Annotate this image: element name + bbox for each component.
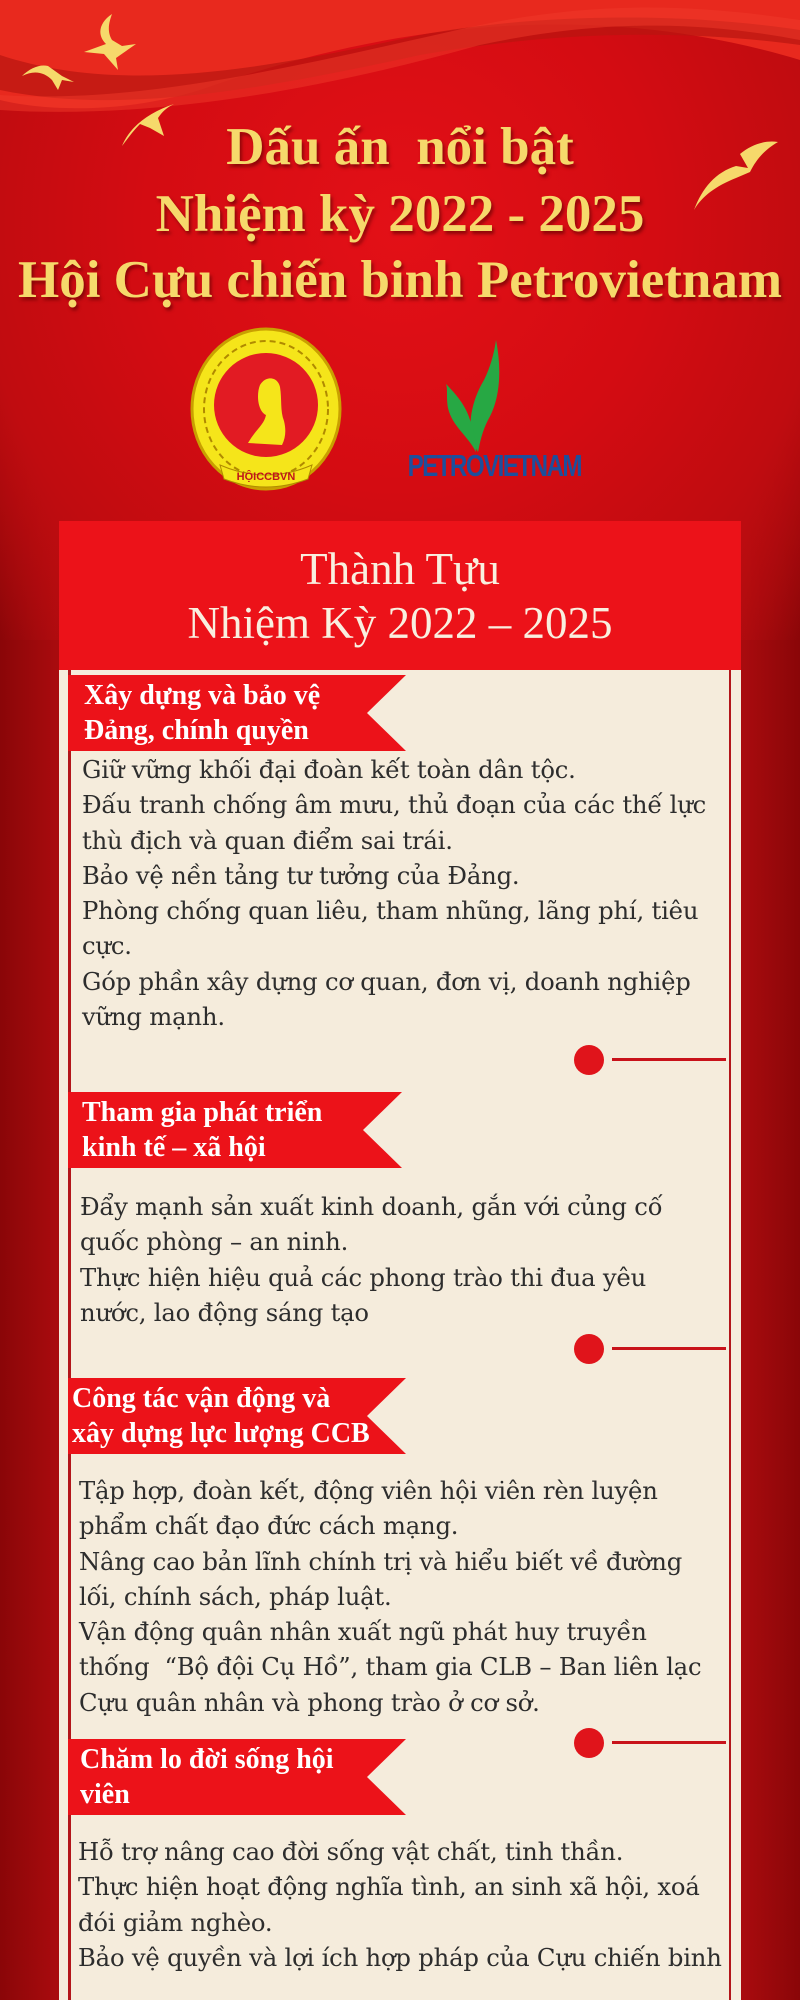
- section 1 text: Giữ vững khối đại đoàn kết toàn dân tộc.: [82, 755, 576, 784]
- icon: birds: [22, 14, 778, 210]
- flag wave top: [0, 0, 800, 112]
- section 3 text: Tập hợp, đoàn kết, động viên hội viên rèn luyện: [79, 1476, 658, 1505]
- title: Nhiệm kỳ 2022 - 2025: [156, 185, 644, 243]
- title: Dấu ấn nổi bật: [226, 118, 574, 176]
- divider dot 1: [574, 1045, 726, 1075]
- logo: Hội CCB emblem: HỘICCBVN: [237, 470, 295, 483]
- section 1 text: Đấu tranh chống âm mưu, thủ đoạn của các thế lực: [82, 790, 706, 819]
- panel: achievements: [59, 521, 741, 2000]
- section 3 ribbon: Công tác vận động và: [72, 1383, 330, 1414]
- section 4 text: Thực hiện hoạt động nghĩa tình, an sinh xã hội, xoá: [78, 1872, 700, 1901]
- logo: Petrovietnam: [408, 340, 581, 483]
- section 2 text: nước, lao động sáng tạo: [80, 1298, 369, 1327]
- section 4 ribbon: [68, 1739, 406, 1815]
- title: Hội Cựu chiến binh Petrovietnam: [18, 251, 782, 309]
- section 1 ribbon: Đảng, chính quyền: [84, 715, 309, 746]
- panel header: Thành Tựu: [300, 544, 500, 594]
- section 3 text: Nâng cao bản lĩnh chính trị và hiểu biết về đường: [79, 1547, 682, 1576]
- section 3 text: phẩm chất đạo đức cách mạng.: [79, 1511, 458, 1540]
- section 1 text: Góp phần xây dựng cơ quan, đơn vị, doanh nghiệp: [82, 967, 691, 996]
- section 1 text: Bảo vệ nền tảng tư tưởng của Đảng.: [82, 861, 519, 890]
- section 2 text: [80, 1192, 662, 1327]
- section 3 text: lối, chính sách, pháp luật.: [79, 1582, 392, 1611]
- section 3 text: Vận động quân nhân xuất ngũ phát huy truyền: [79, 1617, 647, 1646]
- background: red flag top: [0, 0, 800, 640]
- section 2 ribbon: kinh tế – xã hội: [82, 1132, 266, 1163]
- section 1 text: vững mạnh.: [82, 1002, 225, 1031]
- section 3 text: Cựu quân nhân và phong trào ở cơ sở.: [79, 1688, 540, 1717]
- section 1 ribbon: [68, 675, 406, 751]
- decorative border lines: [68, 670, 71, 2000]
- section 4 text: Bảo vệ quyền và lợi ích hợp pháp của Cựu chiến binh: [78, 1943, 722, 1972]
- panel header: [59, 521, 741, 670]
- section 4 text: Hỗ trợ nâng cao đời sống vật chất, tinh thần.: [78, 1837, 623, 1866]
- section 4 ribbon: Chăm lo đời sống hội: [80, 1744, 334, 1775]
- divider dot 2: [574, 1334, 726, 1364]
- divider dot 3: [574, 1728, 726, 1758]
- section 2 text: quốc phòng – an ninh.: [80, 1227, 348, 1256]
- title: [18, 118, 784, 312]
- section 1 ribbon: Xây dựng và bảo vệ: [84, 680, 320, 711]
- logo: Hội CCB emblem: [190, 328, 342, 490]
- section 3 text: thống “Bộ đội Cụ Hồ”, tham gia CLB – Ban liên lạc: [79, 1652, 701, 1681]
- section 4 text: [78, 1837, 722, 1972]
- section 2 text: Thực hiện hiệu quả các phong trào thi đua yêu: [80, 1263, 646, 1292]
- section 1 text: cực.: [82, 931, 132, 960]
- section 4 ribbon: viên: [80, 1779, 130, 1810]
- section 1 text: [82, 755, 706, 1031]
- section 3 text: [78, 1476, 701, 1717]
- section 2 ribbon: Tham gia phát triển: [82, 1097, 322, 1128]
- section 1 text: Phòng chống quan liêu, tham nhũng, lãng phí, tiêu: [82, 896, 698, 925]
- section 3 ribbon: xây dựng lực lượng CCB: [72, 1418, 370, 1449]
- section 3 ribbon: [68, 1378, 406, 1454]
- section 1 text: thù địch và quan điểm sai trái.: [82, 826, 453, 855]
- section 2 ribbon: [68, 1092, 402, 1168]
- logo: Petrovietnam: PETROVIETNAM: [408, 448, 581, 483]
- panel header: Nhiệm Kỳ 2022 – 2025: [188, 598, 612, 648]
- section 4 text: đói giảm nghèo.: [78, 1908, 272, 1937]
- section 2 text: Đẩy mạnh sản xuất kinh doanh, gắn với củng cố: [80, 1192, 662, 1221]
